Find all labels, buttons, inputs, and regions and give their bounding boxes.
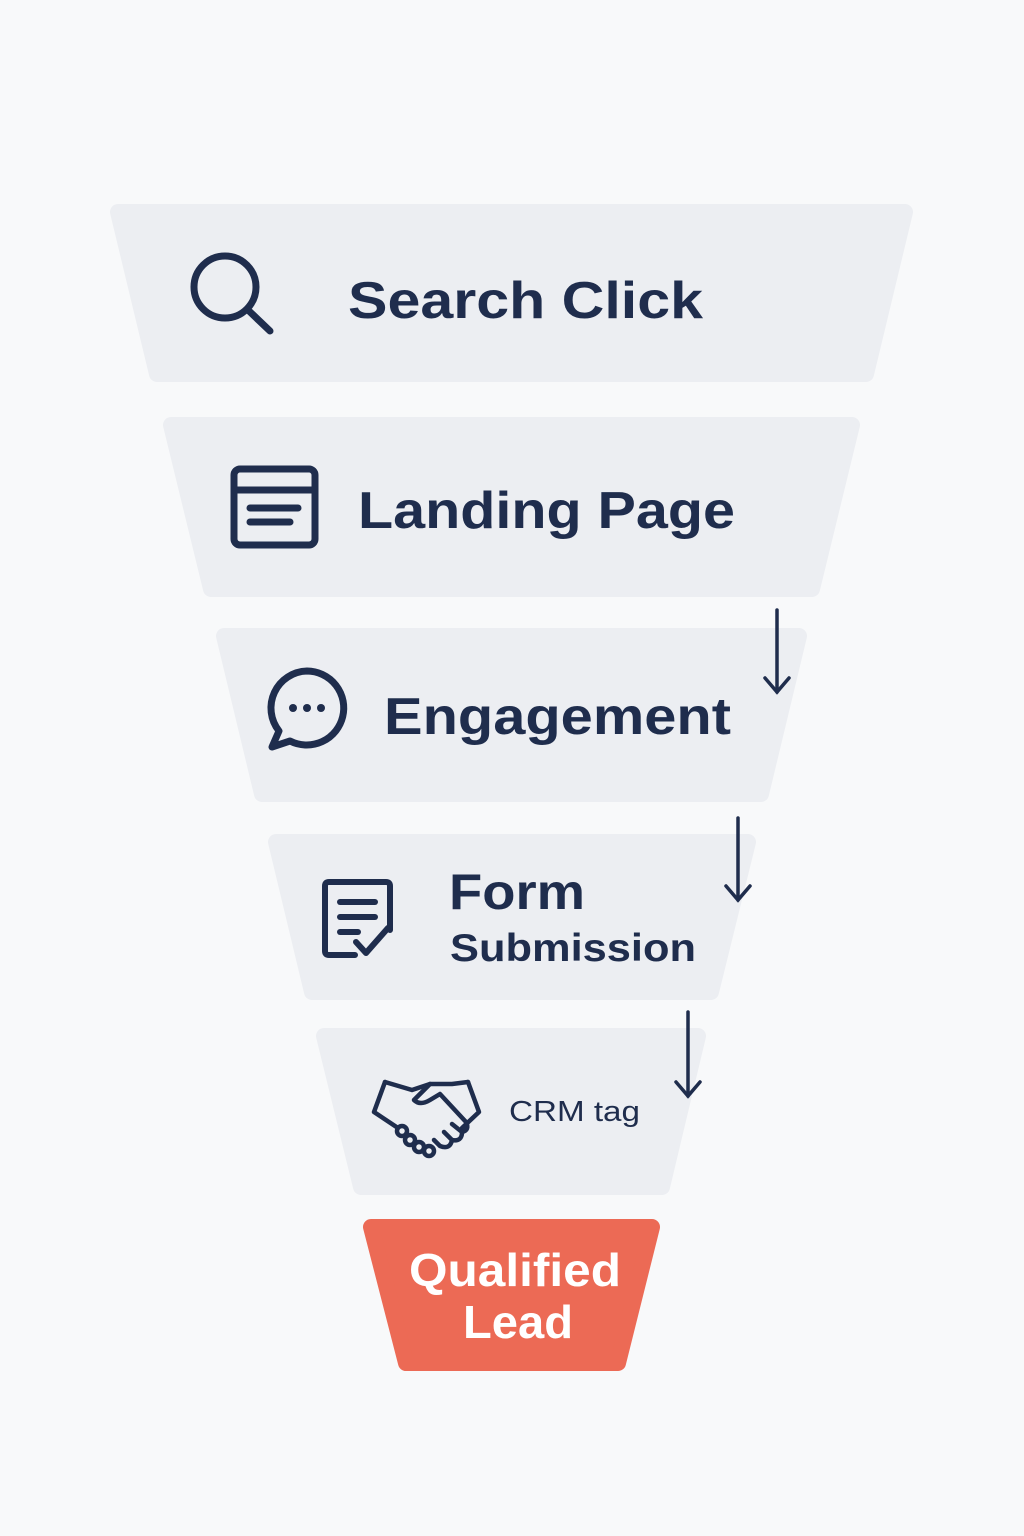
- icon: chat bubble: [271, 671, 344, 747]
- arrow 1: [765, 610, 789, 692]
- icon: handshake: [374, 1082, 479, 1156]
- label: Qualified Lead: Qualified: [409, 1244, 621, 1296]
- stage 6: qualified lead: [371, 1227, 652, 1363]
- stage 3: engagement: [224, 636, 799, 794]
- arrow 3: [676, 1012, 700, 1096]
- icon: browser window: [234, 469, 315, 545]
- label: Form Submission: Form: [449, 864, 585, 920]
- arrow 2: [726, 818, 750, 900]
- stage 2: landing page: [171, 425, 852, 589]
- stage 4: form submission: [276, 842, 748, 992]
- label: Form Submission: [449, 864, 696, 970]
- label: Qualified Lead: [409, 1244, 621, 1348]
- label: Landing Page: Landing Page: [358, 482, 735, 540]
- label: Form Submission: Submission: [450, 927, 696, 970]
- label: Qualified Lead: Lead: [463, 1296, 573, 1348]
- label: CRM tag: CRM tag: [509, 1096, 640, 1128]
- icon: form: [325, 882, 390, 955]
- stage 5: CRM tag: [324, 1036, 698, 1187]
- label: Search Click: Search Click: [348, 272, 703, 330]
- label: Engagement: Engagement: [384, 688, 731, 746]
- icon: magnifier: [194, 256, 270, 331]
- stage 1: search click: [118, 212, 905, 374]
